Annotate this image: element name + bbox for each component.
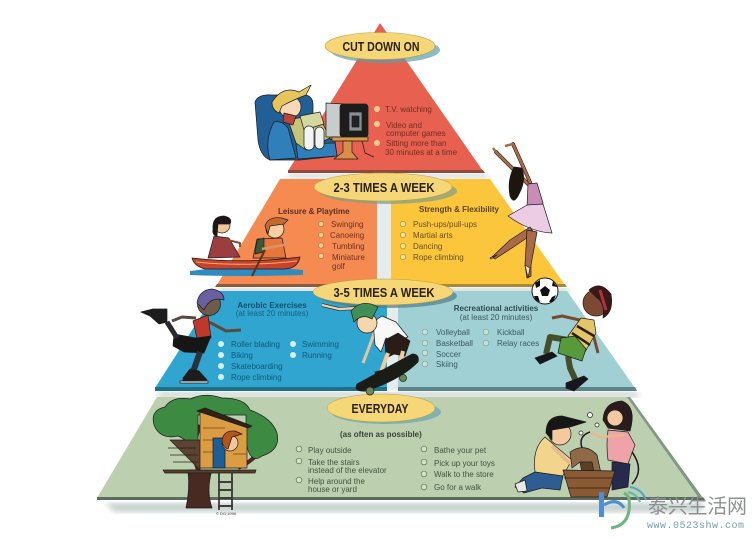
panel: aerobic exercises: Aerobic Exercises bbox=[237, 301, 307, 310]
panel: recreational activities: Skiing bbox=[436, 360, 458, 369]
illustration: child watching TV in armchair bbox=[255, 85, 374, 160]
panel: aerobic exercises: Biking bbox=[231, 351, 253, 360]
heading: cut down on bbox=[325, 32, 440, 63]
watermark: site logo and name: www.0523shw.com bbox=[647, 520, 744, 532]
text block: everyday list left: instead of the elevator bbox=[308, 466, 387, 475]
text block: everyday list right: Walk to the store bbox=[434, 470, 494, 479]
text block: cut down list: computer games bbox=[386, 129, 446, 138]
panel: recreational activities: Basketball bbox=[436, 339, 473, 348]
panel: strength and flexibility: Push-ups/pull-ups bbox=[413, 220, 477, 229]
panel: strength and flexibility: Martial arts bbox=[413, 231, 453, 240]
panel: aerobic exercises: Swimming bbox=[302, 340, 339, 349]
panel: strength and flexibility: Dancing bbox=[413, 242, 442, 251]
text block: cut down list: Sitting more than bbox=[386, 139, 446, 148]
panel: leisure and playtime: Miniature bbox=[332, 253, 365, 262]
panel: aerobic exercises bbox=[155, 291, 387, 391]
text block: everyday list right: Bathe your pet bbox=[434, 446, 487, 455]
illustration: children bathing a dog bbox=[515, 401, 638, 497]
panel: strength and flexibility: Strength & Flexibility bbox=[419, 205, 500, 214]
panel: leisure and playtime: Swinging bbox=[331, 220, 363, 229]
panel: recreational activities: Recreational activities bbox=[454, 304, 539, 313]
illustration: dancer bbox=[490, 144, 552, 278]
tier: 3-5 times a week bbox=[155, 291, 640, 397]
boy in canoe bbox=[253, 218, 288, 258]
heading: 2-3 times a week bbox=[314, 173, 457, 204]
heading: everyday bbox=[327, 394, 441, 424]
panel: recreational activities bbox=[398, 291, 637, 391]
panel: strength and flexibility: Rope climbing bbox=[413, 253, 464, 262]
illustration: boy kicking ball bbox=[535, 286, 612, 391]
text block: cut down list: Video and bbox=[386, 121, 422, 130]
panel: aerobic exercises: (at least 20 minutes) bbox=[236, 309, 309, 318]
text block: everyday list right: Go for a walk bbox=[434, 483, 482, 492]
watermark: site logo and name bbox=[599, 487, 747, 532]
text block: everyday list left: Take the stairs bbox=[308, 458, 360, 467]
panel: leisure and playtime bbox=[215, 179, 377, 287]
heading: cut down on: CUT DOWN ON bbox=[342, 39, 420, 54]
illustration: tree house bbox=[153, 395, 278, 516]
text block: everyday list left: house or yard bbox=[308, 485, 357, 494]
panel: recreational activities: Volleyball bbox=[436, 328, 470, 337]
panel: leisure and playtime: Canoeing bbox=[330, 231, 364, 240]
panel: leisure and playtime: Leisure & Playtime bbox=[278, 207, 350, 216]
illustration: skateboarder bbox=[322, 303, 418, 395]
heading: 3-5 times a week: 3-5 TIMES A WEEK bbox=[334, 285, 435, 300]
text block: cut down list: T.V. watching bbox=[385, 105, 432, 114]
text block: everyday list left: Help around the bbox=[308, 477, 365, 486]
watermark: site logo and name: 泰兴生活网 bbox=[648, 495, 747, 518]
text block: everyday list left bbox=[296, 446, 387, 494]
tier: everyday: (as often as possible) bbox=[340, 430, 422, 439]
panel: recreational activities: Soccer bbox=[436, 350, 461, 359]
panel: leisure and playtime: golf bbox=[332, 262, 346, 271]
panel: leisure and playtime: Tumbling bbox=[332, 242, 365, 251]
text block: everyday list left: Play outside bbox=[308, 446, 352, 455]
panel: aerobic exercises: Running bbox=[302, 351, 332, 360]
panel: recreational activities: Kickball bbox=[497, 328, 525, 337]
heading: everyday: EVERYDAY bbox=[352, 401, 409, 416]
illustration: roller skater bbox=[141, 289, 241, 383]
text block: cut down list bbox=[374, 105, 458, 157]
illustration: tree house: © DG 1996 bbox=[216, 511, 237, 516]
tier: cut down on bbox=[286, 23, 490, 178]
panel: aerobic exercises: Rope climbing bbox=[231, 373, 282, 382]
heading: 2-3 times a week: 2-3 TIMES A WEEK bbox=[334, 180, 435, 195]
girl in canoe bbox=[208, 216, 240, 258]
tier: everyday bbox=[97, 397, 705, 512]
panel: recreational activities: Relay races bbox=[497, 339, 539, 348]
heading: 3-5 times a week bbox=[313, 279, 457, 308]
icon: soccer ball bbox=[532, 278, 558, 304]
text block: everyday list right: Pick up your toys bbox=[434, 459, 495, 468]
panel: aerobic exercises: Skateboarding bbox=[231, 362, 283, 371]
panel: strength and flexibility bbox=[391, 179, 567, 287]
text block: cut down list: 30 minutes at a time bbox=[385, 148, 458, 157]
panel: aerobic exercises: Roller blading bbox=[231, 340, 280, 349]
icon: watermark logo bbox=[599, 487, 646, 528]
tier: 2-3 times a week bbox=[214, 179, 572, 293]
text block: everyday list right bbox=[421, 446, 495, 492]
illustration: canoe with two children bbox=[190, 216, 303, 276]
panel: recreational activities: (at least 20 minutes) bbox=[460, 313, 533, 322]
